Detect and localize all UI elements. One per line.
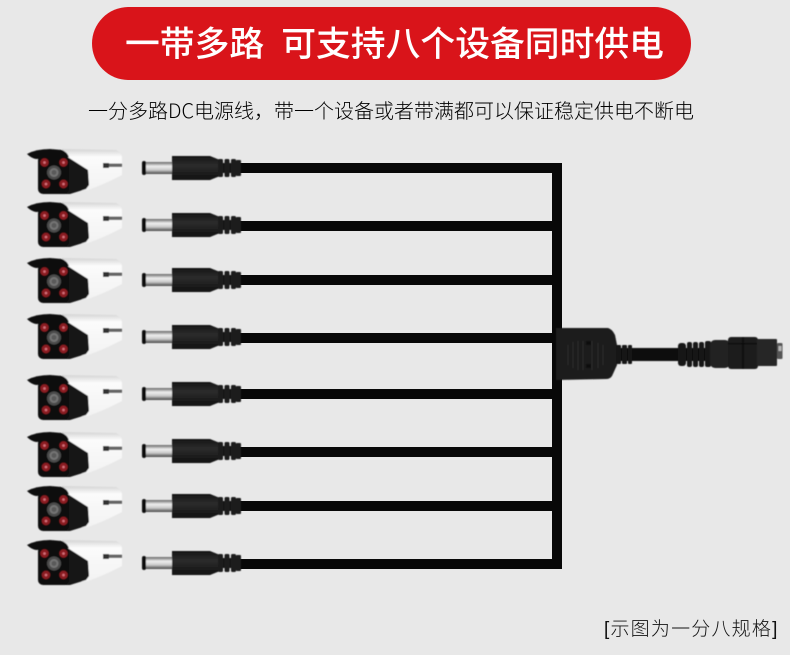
trunk cable: [552, 163, 562, 569]
icon: DC plug 1: [142, 156, 241, 180]
icon: DC plug 8: [142, 551, 241, 575]
title: 一带多路 可支持八个设备同时供电: [125, 25, 664, 64]
caption: diagram shows 1-to-8 model: [示图为一分八规格]: [604, 619, 779, 640]
icon: DC plug 6: [142, 439, 241, 463]
icon: DC plug 5: [142, 382, 241, 406]
icon: camera 2: [27, 202, 122, 247]
cable branches: [238, 163, 558, 569]
title banner background: [92, 7, 691, 80]
icon: camera 1: [27, 149, 122, 194]
icon: DC plug 4: [142, 325, 241, 349]
icon: camera 6: [27, 432, 122, 477]
subtitle: 一分多路DC电源线，带一个设备或者带满都可以保证稳定供电不断电: [88, 95, 694, 124]
icon: DC plug 3: [142, 268, 241, 292]
icon: DC plug 7: [142, 494, 241, 518]
icon: camera 7: [27, 486, 122, 531]
junction box and output connector: [556, 328, 782, 380]
icon: DC plug 2: [142, 213, 241, 237]
icon: camera 8: [27, 540, 122, 585]
icon: camera 3: [27, 258, 122, 303]
icon: camera 5: [27, 375, 122, 420]
icon: camera 4: [27, 314, 122, 359]
